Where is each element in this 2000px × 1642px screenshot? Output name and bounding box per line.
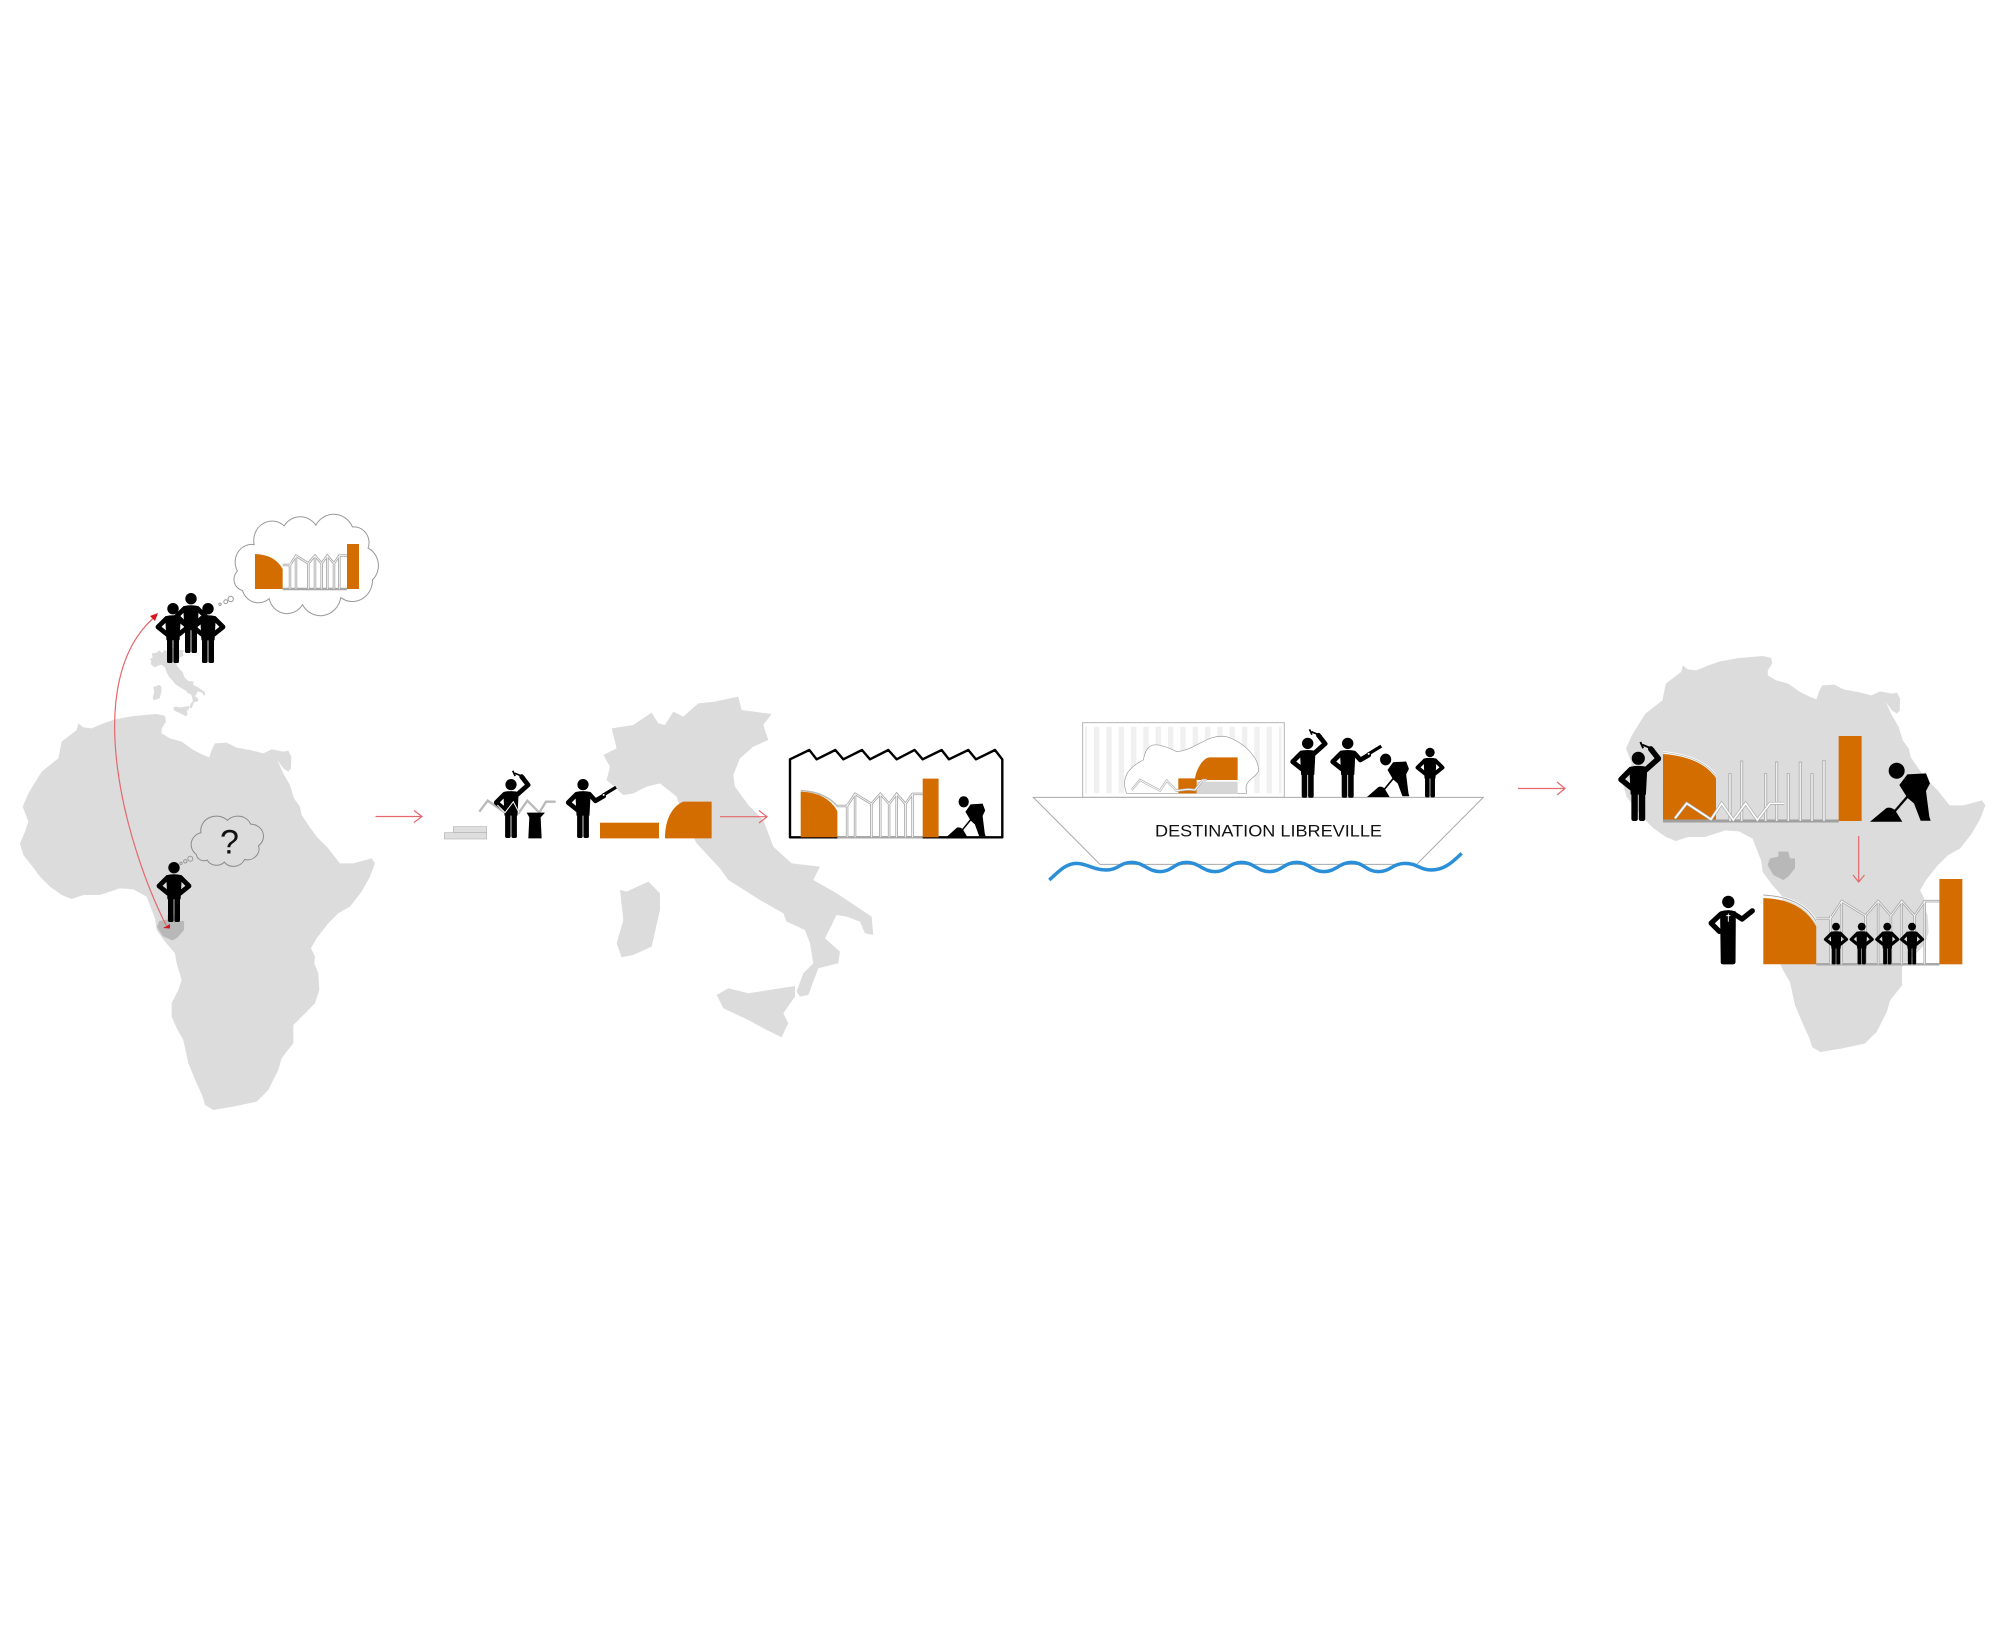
icon: four people — [1826, 923, 1922, 964]
finished building — [1763, 879, 1962, 964]
icon: ship worker with hammer — [1293, 729, 1325, 798]
water waves — [1049, 853, 1462, 880]
arrow: ship to Africa — [1518, 782, 1565, 795]
container — [1083, 723, 1284, 797]
icon: big digging worker — [1870, 763, 1931, 822]
callout: question cloud: ? — [220, 824, 239, 862]
arrow: fabrication to factory — [720, 810, 767, 823]
arrow: construction to finished — [1853, 836, 1864, 882]
arrow: step 1 to step 2 — [376, 810, 422, 822]
orange beam — [600, 823, 659, 838]
arrow: curved travel arrow — [115, 613, 170, 928]
icon: ship digging worker — [1367, 754, 1409, 797]
map: Africa left — [20, 714, 375, 1110]
text: destination label: DESTINATION LIBREVILLE — [1155, 822, 1382, 840]
icon: worker with saw — [568, 779, 616, 838]
panel: step 1 Africa to Italy — [20, 514, 378, 1110]
icon: group of three people — [158, 593, 223, 663]
map: Africa right — [1623, 656, 1985, 1052]
icon: zigzag overlay — [497, 802, 519, 813]
icon: ship standing worker — [1418, 748, 1442, 797]
panel: step 2 fabrication in Italy — [444, 697, 873, 1037]
panel: construction in Gabon — [1621, 656, 1985, 1052]
panel: factory assembly — [790, 750, 1002, 837]
icon: priest — [1711, 896, 1752, 964]
icon: stacked materials — [444, 827, 487, 839]
panel: shipping to Libreville — [1033, 723, 1483, 880]
icon: anvil — [527, 813, 545, 838]
icon: digging worker — [946, 796, 986, 837]
map: small Italy — [150, 647, 205, 716]
ship hull — [1033, 797, 1483, 864]
icon: zigzag roof element — [479, 801, 556, 813]
map: Italy large — [603, 697, 873, 1037]
icon: person with question — [159, 862, 189, 922]
building in factory — [801, 779, 939, 837]
icon: worker with hammer — [496, 771, 528, 838]
map: Gabon right — [1768, 852, 1795, 880]
exploded building under construction — [1663, 736, 1862, 821]
factory outline — [790, 750, 1002, 837]
icon: builder with hammer — [1621, 742, 1658, 821]
icon: ship worker with saw — [1333, 738, 1381, 798]
orange dome — [665, 802, 712, 838]
callout: building dream cloud — [219, 514, 378, 616]
map: Gabon highlighted — [157, 915, 184, 940]
callout: question cloud — [180, 816, 263, 866]
